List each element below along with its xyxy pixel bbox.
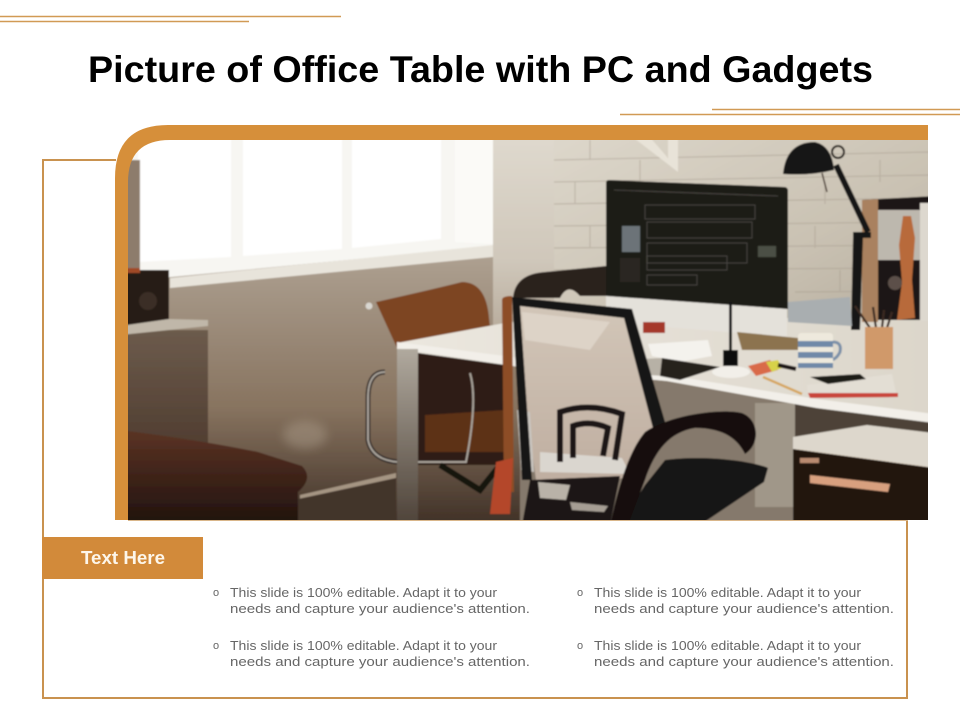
bullet: bottom left: o	[213, 640, 219, 652]
brick under desk	[755, 403, 795, 507]
floor	[296, 478, 396, 508]
bullet: top left	[213, 585, 530, 616]
label: Text Here	[42, 537, 203, 579]
bullet: top right: o	[577, 587, 583, 599]
bullet: bottom left: This slide is 100% editable. Adapt it to your	[230, 638, 498, 653]
photo bottom rule	[128, 520, 908, 522]
mug	[798, 333, 840, 368]
shelf with books and figure	[862, 196, 934, 322]
monitor screen	[606, 180, 788, 309]
office photo illustration	[120, 135, 935, 525]
desk lamp	[783, 142, 871, 330]
dark tablet	[660, 358, 720, 380]
stylus stand	[723, 302, 738, 366]
drawer unit	[793, 425, 934, 525]
title: Picture of Office Table with PC and Gadgets	[88, 49, 873, 90]
far brown chair	[366, 282, 505, 490]
orange photo frame	[115, 125, 928, 520]
wall light reflection	[283, 421, 327, 449]
desk front edge	[397, 342, 934, 423]
bullet: top left: needs and capture your audience's attention.	[230, 601, 530, 616]
bullet: top left: o	[213, 587, 219, 599]
bullet: bottom left	[213, 638, 530, 669]
under desk wall	[520, 370, 793, 525]
mesh office chair	[490, 296, 768, 525]
baseboard	[300, 473, 396, 499]
desk top	[397, 318, 934, 423]
pencil	[763, 377, 802, 394]
back wall	[168, 256, 521, 520]
left cabinet	[128, 318, 209, 444]
pencil holder	[855, 306, 893, 369]
light tablet pad	[646, 358, 663, 376]
bullet: top left: This slide is 100% editable. Adapt it to your	[230, 585, 498, 600]
red eraser	[643, 322, 665, 333]
keyboard	[648, 340, 712, 362]
bullet: top right: This slide is 100% editable. Adapt it to your	[594, 585, 862, 600]
bullet: bottom right: o	[577, 640, 583, 652]
radio box	[128, 268, 170, 326]
outline panel	[43, 160, 907, 698]
bullet: top right	[577, 585, 894, 616]
bullet: bottom right: This slide is 100% editable. Adapt it to your	[594, 638, 862, 653]
label: Text Here: Text Here	[81, 548, 165, 568]
book with red edge	[808, 384, 899, 399]
bullet: bottom left: needs and capture your audience's attention.	[230, 654, 530, 669]
bullet: bottom right	[577, 638, 894, 669]
sofa corner	[128, 431, 308, 520]
notebook	[737, 332, 798, 350]
brick wall	[554, 135, 934, 340]
wall upper right light area	[492, 140, 554, 326]
mouse	[712, 366, 750, 378]
phone	[810, 374, 866, 384]
right under desk shadow	[794, 404, 928, 438]
black chair behind	[513, 266, 606, 298]
bullet: top right: needs and capture your audience's attention.	[594, 601, 894, 616]
decorative rule lines top right	[620, 110, 960, 114]
sticky notes and marker	[748, 360, 796, 376]
bullet: bottom right: needs and capture your audience's attention.	[594, 654, 894, 669]
monitor stand and chin	[606, 295, 787, 337]
magazine stack	[788, 297, 852, 326]
decorative rule lines top left	[0, 16, 341, 22]
wall grey strip at left	[128, 159, 141, 270]
desk leg	[397, 349, 418, 525]
window	[120, 135, 493, 288]
